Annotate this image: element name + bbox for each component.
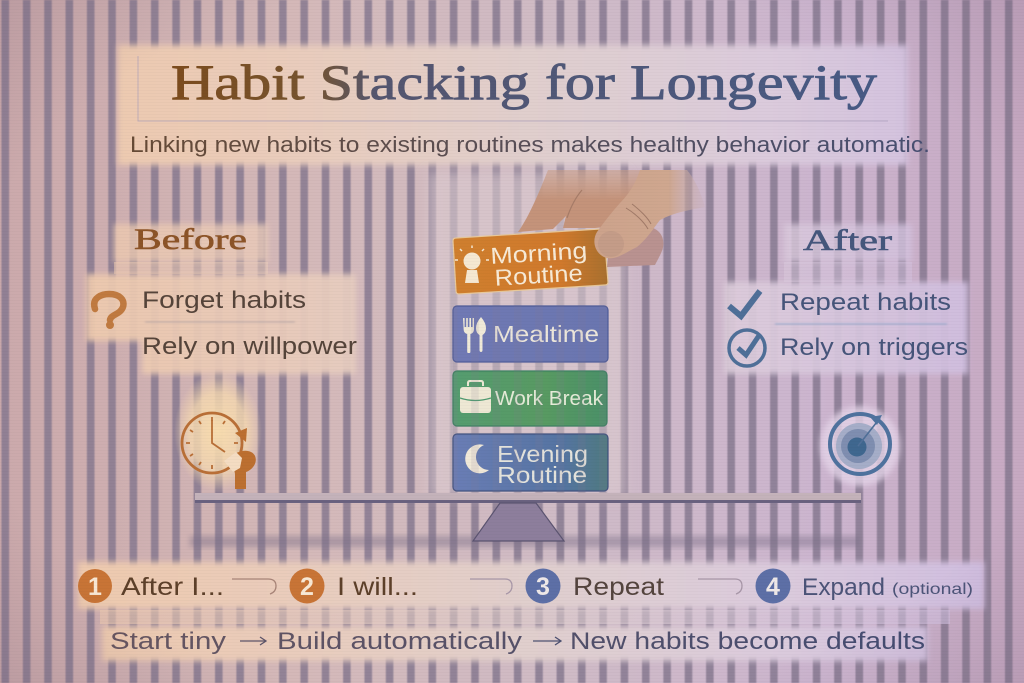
summary: start tiny: Start tiny bbox=[110, 628, 226, 655]
scale board bbox=[195, 493, 861, 503]
label: morning routine: Routine bbox=[494, 260, 583, 291]
icon: clock with hand bbox=[182, 413, 256, 489]
summary: build automatically: Build automatically bbox=[277, 628, 522, 655]
icon: target with arrow bbox=[830, 414, 890, 474]
summary: new habits: New habits become defaults bbox=[570, 628, 925, 655]
scale shadow bbox=[190, 536, 860, 547]
icon: question mark bbox=[94, 294, 123, 328]
after divider bbox=[775, 323, 947, 325]
panel: central backdrop bbox=[428, 172, 626, 498]
label: I will: I will... bbox=[337, 573, 418, 601]
panel: target glow bbox=[820, 406, 900, 486]
before heading: Before bbox=[134, 223, 247, 256]
block: work break bbox=[453, 371, 607, 426]
icon: fork and spoon bbox=[463, 317, 486, 353]
label: morning routine bbox=[490, 237, 589, 291]
panel: before heading backdrop bbox=[114, 224, 268, 262]
block: morning routine bbox=[453, 229, 608, 491]
connector 2 bbox=[470, 579, 512, 594]
arrow 1 bbox=[240, 637, 266, 645]
panel: before list backdrop bbox=[86, 274, 356, 374]
block: mealtime bbox=[453, 306, 608, 362]
panel: after heading fade bbox=[784, 262, 912, 282]
panel: before heading fade bbox=[114, 262, 268, 274]
panel: title backdrop bbox=[118, 45, 908, 165]
after item: repeat habits: Repeat habits bbox=[780, 289, 951, 316]
icon: check mark bbox=[729, 291, 760, 316]
label: morning routine: Morning bbox=[490, 237, 588, 269]
step 1 bbox=[78, 569, 224, 603]
before item: forget habits: Forget habits bbox=[142, 287, 306, 314]
badge 2: 2 bbox=[300, 573, 314, 601]
badge 3: 3 bbox=[536, 573, 550, 601]
icon: circled check bbox=[729, 330, 765, 366]
label: repeat: Repeat bbox=[573, 573, 664, 601]
arrow 2 bbox=[533, 637, 561, 645]
label: mealtime: Mealtime bbox=[493, 321, 599, 347]
step 2 bbox=[290, 568, 418, 604]
panel: summary backdrop bbox=[102, 626, 928, 661]
scale fulcrum bbox=[473, 503, 564, 541]
title: Habit Stacking for Longevity bbox=[171, 54, 877, 110]
icon: briefcase bbox=[460, 381, 491, 413]
before divider bbox=[145, 321, 295, 323]
badge 4: 4 bbox=[766, 573, 780, 601]
block stripes overlay bbox=[453, 306, 608, 491]
label: optional: (optional) bbox=[892, 581, 973, 598]
panel: steps fade bbox=[100, 610, 950, 624]
badge 4 bbox=[756, 568, 790, 604]
panel: title inner rule bbox=[138, 56, 888, 121]
subtitle: Linking new habits to existing routines makes healthy behavior automatic. bbox=[130, 132, 930, 157]
step 3 bbox=[526, 568, 664, 604]
label: work break: Work Break bbox=[495, 388, 604, 410]
badge 1 bbox=[78, 569, 112, 603]
label: after I: After I... bbox=[121, 573, 224, 601]
connector 1 bbox=[232, 579, 276, 594]
after item: rely on triggers: Rely on triggers bbox=[780, 334, 968, 361]
summary line bbox=[110, 628, 925, 655]
panel: steps backdrop bbox=[78, 562, 984, 609]
label: evening routine: Evening bbox=[497, 441, 588, 467]
panel: clock glow bbox=[174, 372, 262, 492]
block: evening routine bbox=[453, 434, 608, 491]
badge 1: 1 bbox=[88, 573, 102, 601]
label: evening routine: Routine bbox=[497, 462, 587, 488]
connector 3 bbox=[698, 579, 742, 594]
before item: rely on willpower: Rely on willpower bbox=[142, 333, 357, 360]
block stack bbox=[453, 229, 608, 491]
step 4 bbox=[756, 568, 973, 604]
after heading: After bbox=[803, 224, 892, 257]
panel: after heading backdrop bbox=[784, 224, 912, 262]
icon: hand placing block bbox=[518, 170, 705, 267]
icon: sun bbox=[455, 246, 489, 283]
label: expand: Expand bbox=[802, 574, 885, 601]
icon: moon bbox=[465, 444, 489, 473]
panel: after list backdrop bbox=[724, 282, 968, 374]
